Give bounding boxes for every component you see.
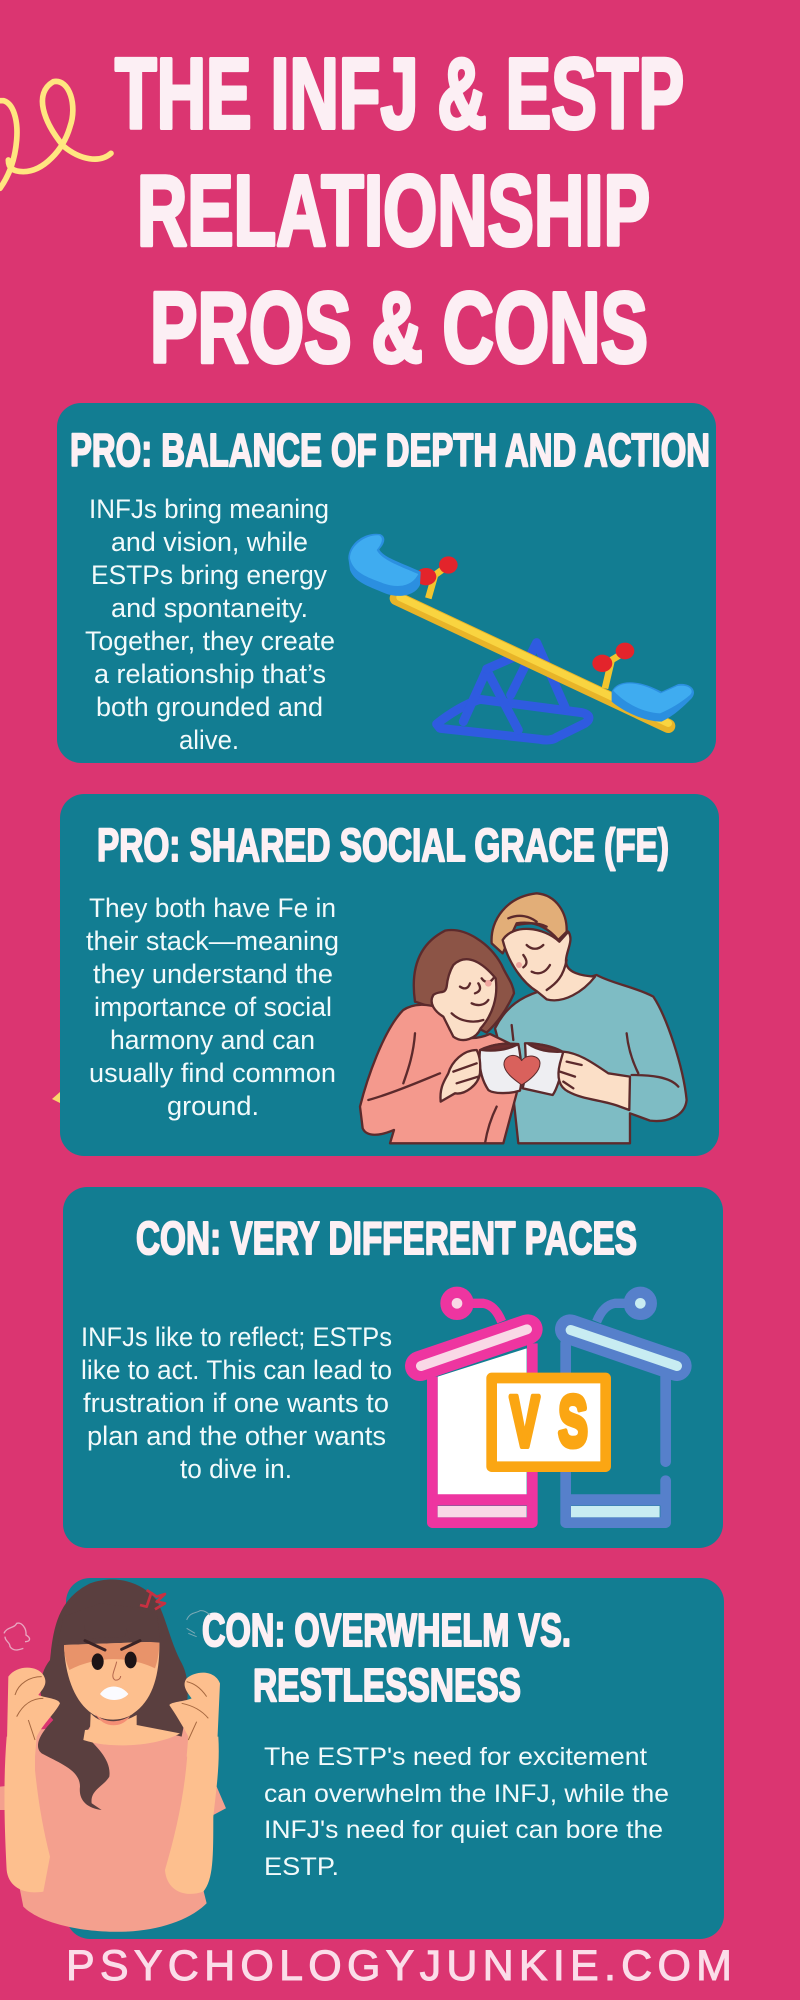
text block: balance description: ESTPs bring energy <box>91 560 327 590</box>
text block: balance description: Together, they create <box>85 626 335 656</box>
text block: balance description: and vision, while <box>111 527 308 557</box>
text block: overwhelm description <box>264 1743 669 1881</box>
text block: shared social grace description: They both have Fe in <box>89 893 336 923</box>
icon: steam puff near heading <box>187 1611 210 1637</box>
text block: balance description: a relationship that’s <box>94 659 326 689</box>
text block: balance description: alive. <box>179 725 239 755</box>
text block: paces description <box>81 1322 392 1484</box>
text block: paces description: to dive in. <box>180 1454 292 1484</box>
text block: shared social grace description: they understand the <box>93 959 333 989</box>
text block: overwhelm description: ESTP. <box>264 1853 339 1881</box>
heading: overwhelm vs restlessness <box>202 1604 571 1711</box>
text block: paces description: frustration if one wants to <box>83 1388 389 1418</box>
text block: overwhelm description: INFJ's need for quiet can bore the <box>264 1816 663 1844</box>
decorative yellow squiggle <box>0 81 111 188</box>
text block: balance description <box>85 494 335 755</box>
icon: two podiums versus <box>420 1292 677 1523</box>
illustration: frustrated woman <box>0 1579 226 1932</box>
text block: overwhelm description: The ESTP's need for excitement <box>264 1743 647 1771</box>
text block: balance description: INFJs bring meaning <box>89 494 329 524</box>
panel: con very different paces <box>63 1187 723 1548</box>
text block: balance description: and spontaneity. <box>111 593 308 623</box>
panel: pro shared social grace <box>52 794 719 1156</box>
text block: shared social grace description: ground. <box>167 1091 259 1121</box>
badge: VS: S <box>558 1382 588 1462</box>
text block: shared social grace description: harmony and can <box>110 1025 315 1055</box>
badge: VS <box>492 1378 606 1467</box>
panel: con overwhelm vs restlessness <box>0 1578 724 1939</box>
podium: blue <box>566 1292 677 1523</box>
text block: balance description: both grounded and <box>96 692 323 722</box>
text block: shared social grace description: usually find common <box>89 1058 336 1088</box>
text block: shared social grace description: importance of social <box>94 992 332 1022</box>
icon: small yellow flick <box>52 1092 60 1103</box>
heading: overwhelm vs restlessness: CON: OVERWHELM VS. <box>202 1604 571 1656</box>
text block: shared social grace description <box>86 893 339 1121</box>
badge: VS: V <box>510 1382 539 1462</box>
podium: pink <box>420 1292 532 1523</box>
text block: shared social grace description: their stack—meaning <box>86 926 339 956</box>
heading: overwhelm vs restlessness: RESTLESSNESS <box>253 1659 521 1711</box>
icon: couple with mugs <box>360 893 687 1143</box>
icon: seesaw <box>348 534 694 740</box>
title <box>115 38 684 384</box>
footer: website url: PSYCHOLOGYJUNKIE.COM <box>66 1942 732 1990</box>
text block: paces description: INFJs like to reflect; ESTPs <box>81 1322 392 1352</box>
text block: overwhelm description: can overwhelm the INFJ, while the <box>264 1780 669 1808</box>
text block: paces description: plan and the other wants <box>87 1421 386 1451</box>
text block: paces description: like to act. This can lead to <box>81 1355 392 1385</box>
panel: pro balance of depth and action <box>57 403 716 763</box>
